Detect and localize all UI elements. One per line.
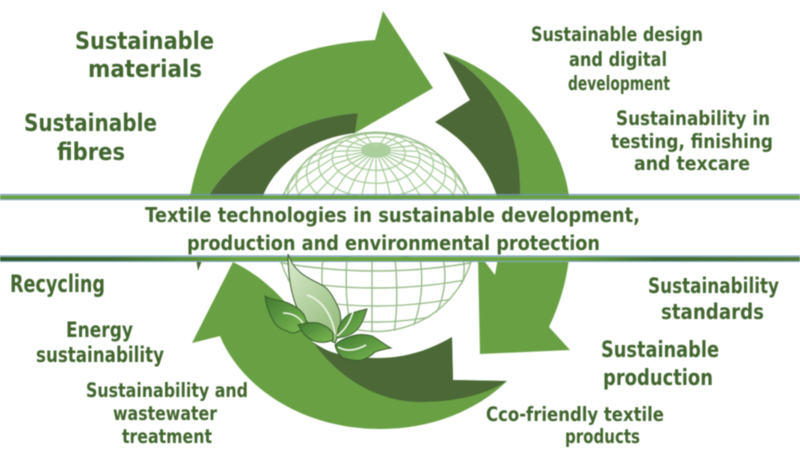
title: central heading: production and environmental protection <box>187 231 600 255</box>
label: Energy sustainability <box>36 318 164 367</box>
label: Sustainable fibres: Sustainable <box>24 109 157 137</box>
label: Sustainable fibres: fibres <box>57 138 125 166</box>
label: Sustainability standards <box>648 274 779 324</box>
label: Sustainability and wastewater treatment: wastewater <box>113 402 217 425</box>
label: Cco-friendly textile products <box>486 403 664 448</box>
arrow: right recycling arrow, lower part <box>478 258 570 354</box>
arrow: top recycling arrow <box>190 11 433 196</box>
icon: green leaves <box>265 254 391 360</box>
label: Recycling: Recycling <box>10 270 105 298</box>
arrow: bottom recycling arrow <box>192 258 507 429</box>
label: Sustainable production: Sustainable <box>601 338 719 363</box>
label: Sustainable materials: materials <box>88 55 202 83</box>
title: central heading <box>145 203 640 255</box>
label: Sustainable production <box>601 338 719 391</box>
label: Sustainability standards: standards <box>661 300 764 324</box>
label: Sustainability in testing, finishing and texcare <box>611 107 773 175</box>
label: Sustainable fibres <box>24 109 157 166</box>
title: central heading: Textile technologies in sustainable development, <box>145 203 640 227</box>
band: central white title band <box>0 194 800 262</box>
label: Sustainable materials: Sustainable <box>75 27 214 55</box>
label: Sustainable production: production <box>603 366 713 391</box>
label: Sustainable design and digital development <box>531 23 703 95</box>
label: Cco-friendly textile products: products <box>565 425 640 448</box>
arrow: right recycling arrow, upper part <box>435 52 569 196</box>
label: Energy sustainability: Energy <box>66 318 133 342</box>
label: Sustainable materials <box>75 27 214 83</box>
label: Sustainability and wastewater treatment <box>86 379 248 448</box>
label: Sustainable design and digital development: development <box>568 72 670 95</box>
label: Sustainability in testing, finishing and texcare: testing, finishing <box>611 130 773 153</box>
label: Sustainability in testing, finishing and texcare: Sustainability in <box>616 107 770 130</box>
icon: wireframe globe <box>276 132 476 334</box>
label: Sustainable design and digital development: Sustainable design <box>531 23 703 46</box>
label: Energy sustainability: sustainability <box>36 343 164 367</box>
label: Sustainability in testing, finishing and texcare: and texcare <box>634 152 750 175</box>
label: Sustainable design and digital development: and digital <box>569 48 667 71</box>
label: Sustainability and wastewater treatment: Sustainability and <box>86 379 248 402</box>
label: Cco-friendly textile products: Cco-friendly textile <box>486 403 664 426</box>
label: Sustainability and wastewater treatment: treatment <box>122 425 212 448</box>
